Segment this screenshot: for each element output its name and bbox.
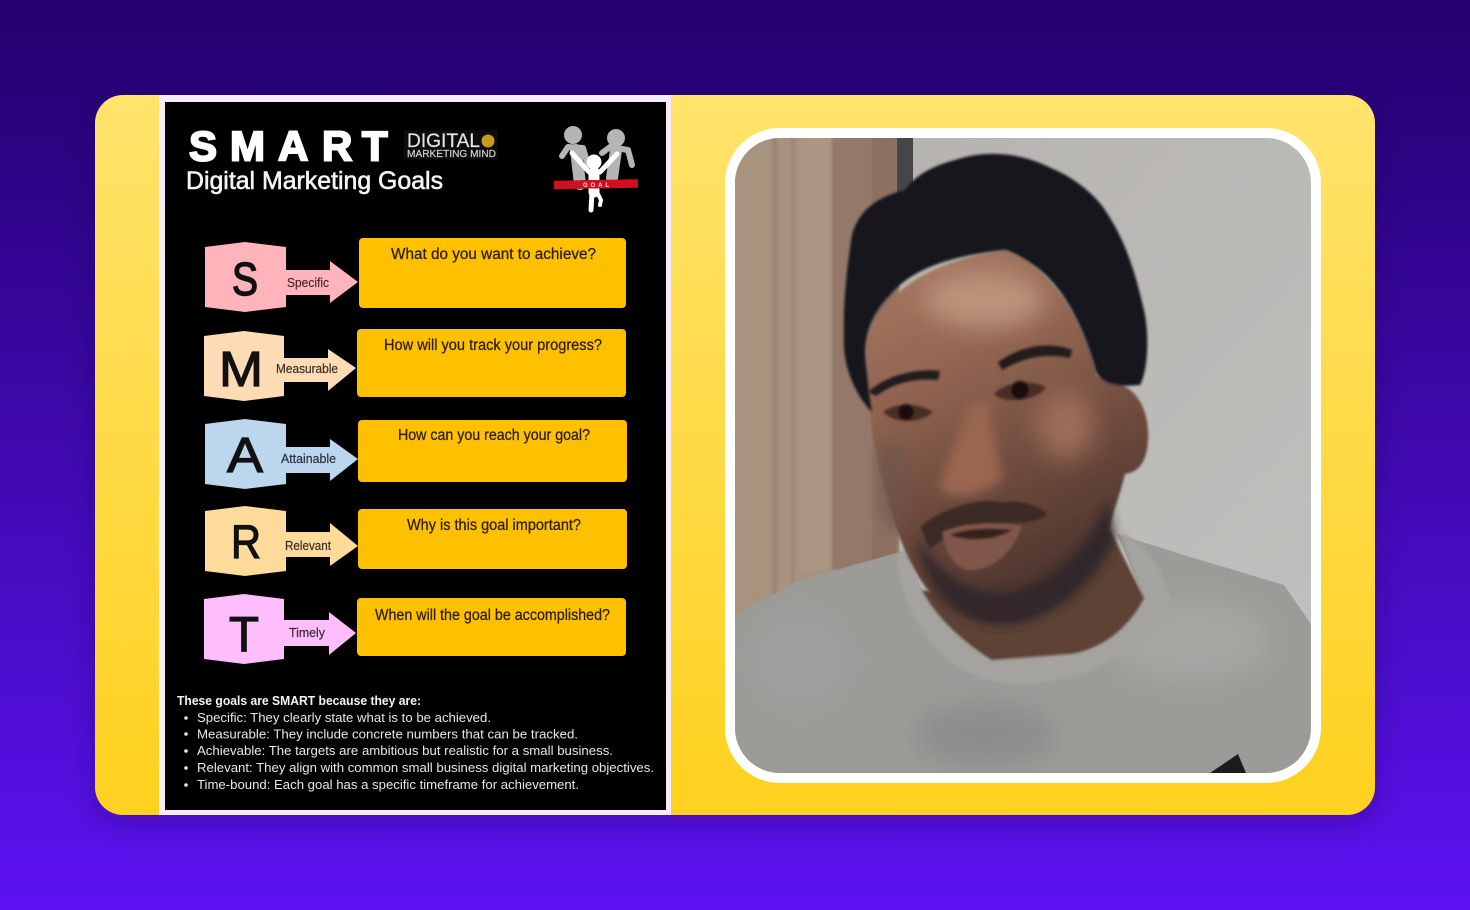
eye right: [994, 381, 1046, 400]
text block: why SMART: Achievable: The targets are ambitious but realistic for a small business.: [197, 743, 613, 758]
question: How will you track your progress?: [384, 337, 602, 354]
letter S: S: [232, 253, 258, 305]
moustache: [920, 501, 1047, 550]
mouth: [942, 524, 1022, 570]
label Specific: Specific: [287, 275, 329, 290]
shirt shading: [922, 611, 1256, 764]
letter T: T: [229, 608, 259, 662]
text block: why SMART: Specific: They clearly state what is to be achieved.: [197, 710, 491, 725]
label Measurable: Measurable: [276, 361, 338, 376]
left cheek shade: [877, 444, 903, 528]
text block: why SMART: [177, 693, 654, 792]
A arrow shape: [205, 419, 358, 489]
M arrow shape: [204, 331, 356, 401]
shirt: [725, 534, 1320, 780]
wall: [735, 138, 1311, 773]
heading: SMART: SMART: [189, 122, 388, 170]
curtain: [725, 130, 899, 630]
answer box: [359, 238, 626, 308]
eyebrow right: [998, 346, 1072, 370]
text block: why SMART: Measurable: They include concrete numbers that can be tracked.: [197, 726, 578, 742]
nose: [940, 400, 1002, 496]
row: Specific: [205, 238, 626, 312]
eyebrow left: [868, 370, 940, 396]
forehead highlight: [925, 272, 1045, 328]
logo: Digital Marketing Mind: DIGITAL: [407, 131, 480, 152]
letter R: R: [231, 515, 261, 568]
question: What do you want to achieve?: [391, 246, 596, 263]
neck: [922, 530, 1144, 660]
logo: Digital Marketing Mind: [404, 130, 498, 160]
row: Attainable: [205, 419, 627, 489]
answer box: [357, 598, 626, 656]
text block: why SMART: Time-bound: Each goal has a specific timeframe for achievement.: [197, 777, 579, 792]
row: Relevant: [205, 506, 627, 576]
question: How can you reach your goal?: [398, 427, 590, 444]
label Relevant: Relevant: [285, 538, 331, 553]
answer box: [358, 509, 627, 569]
question: When will the goal be accomplished?: [375, 607, 610, 624]
beard: [915, 500, 1115, 625]
yellow card: [95, 95, 1375, 815]
hair: [844, 154, 1147, 412]
logo: Digital Marketing Mind: MARKETING MIND: [407, 148, 496, 160]
letter M: M: [219, 343, 263, 397]
face: [866, 250, 1148, 622]
collar: [897, 532, 1171, 684]
text block: why SMART: These goals are SMART because they are:: [177, 693, 421, 708]
shirt logo: [1210, 754, 1246, 773]
row: Measurable: [204, 329, 626, 401]
R arrow shape: [205, 506, 358, 576]
portrait frame: [725, 128, 1321, 783]
answer box: [357, 329, 626, 397]
row: Timely: [204, 594, 626, 664]
eye left: [883, 404, 933, 421]
letter A: A: [227, 429, 263, 483]
answer box: [358, 420, 627, 482]
panel: SMART infographic: [159, 95, 671, 815]
window post: [897, 138, 913, 194]
right cheek: [1037, 391, 1093, 459]
icon: goal runners: [554, 126, 638, 210]
text block: why SMART: Relevant: They align with common small business digital marketing objectives.: [197, 760, 654, 775]
question: Why is this goal important?: [407, 517, 581, 534]
label Attainable: Attainable: [281, 451, 336, 466]
heading: Digital Marketing Goals: Digital Marketing Goals: [186, 167, 443, 195]
label Timely: Timely: [289, 625, 325, 640]
S arrow shape: [205, 242, 358, 312]
icon: goal runners: GOAL: [583, 183, 609, 189]
T arrow shape: [204, 594, 356, 664]
